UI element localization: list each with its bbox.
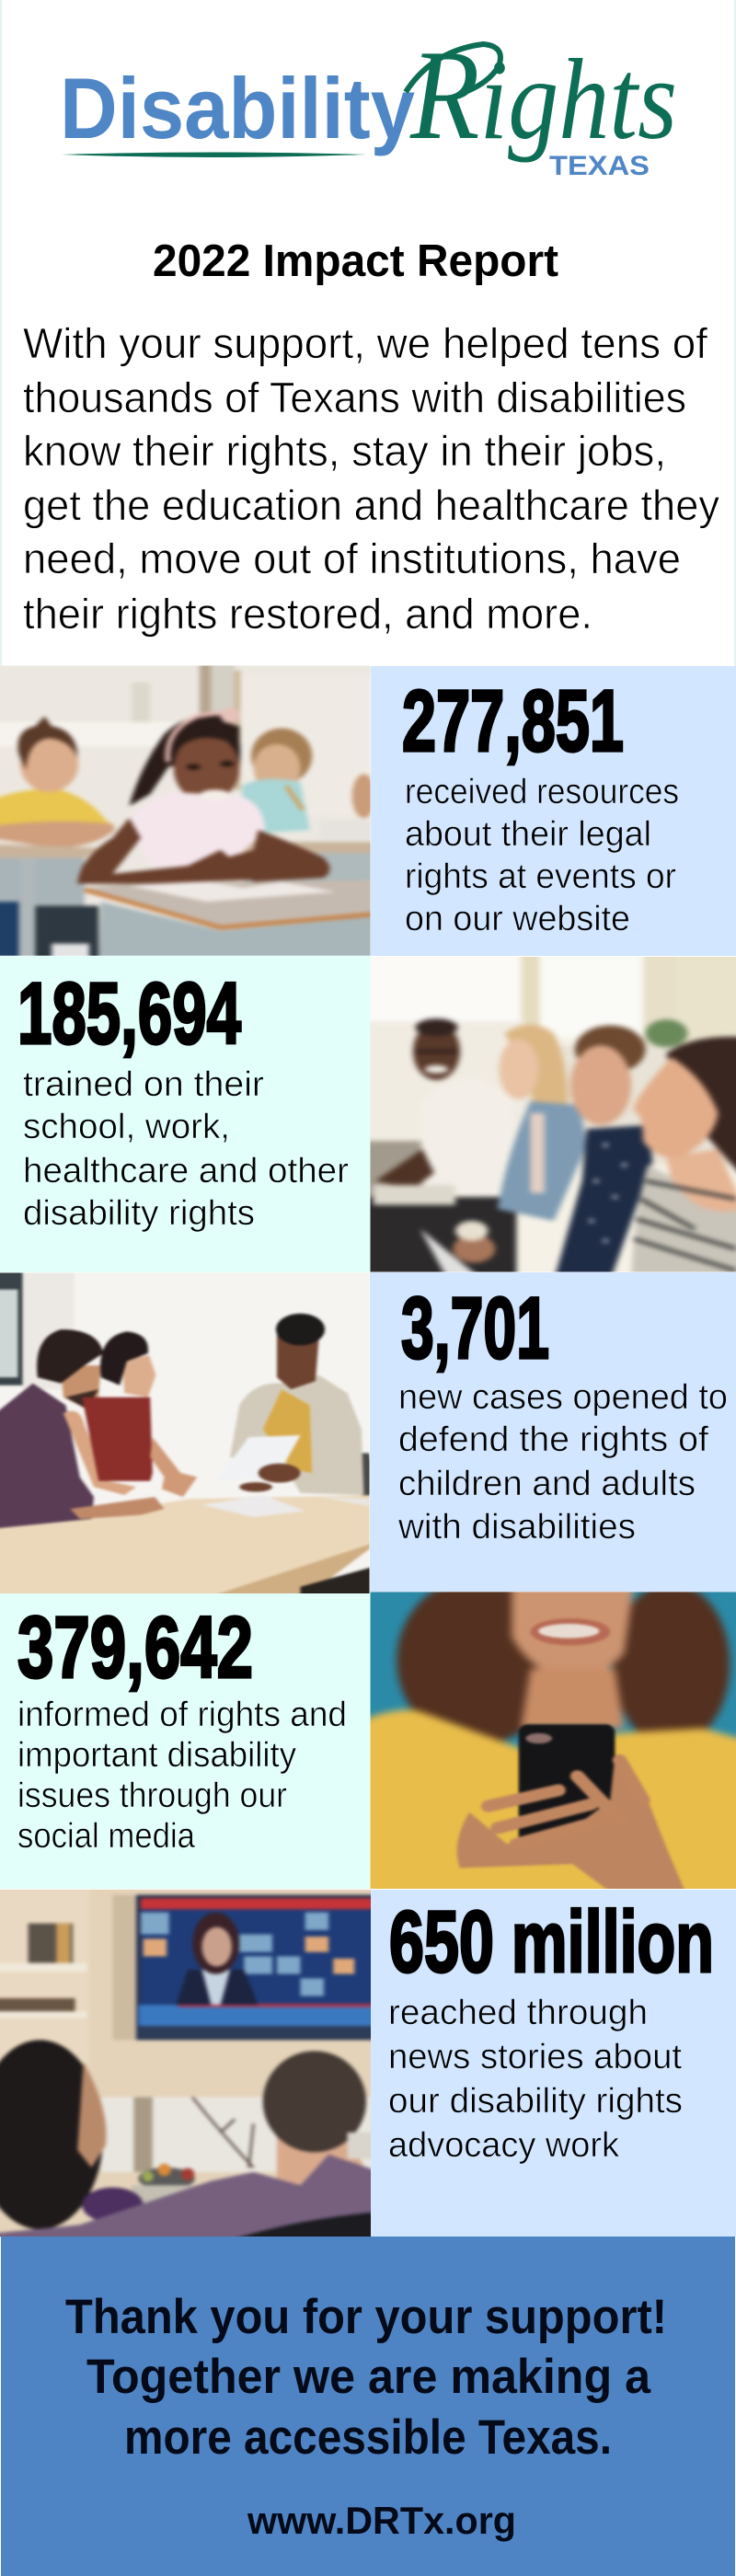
thank-you message: Thank you for your support!: [65, 2290, 667, 2344]
stat panel: 379,642: [0, 1593, 371, 1889]
stat panel: 185,694: [0, 956, 371, 1272]
website URL: www.DRTx.org: [247, 2499, 516, 2542]
intro text block: know their rights, stay in their jobs,: [23, 427, 666, 475]
photo: advisor meeting with couple at table: [0, 1266, 380, 1601]
description: healthcare and other: [23, 1152, 349, 1190]
number: 277,851: 277,851: [402, 673, 624, 770]
number: 379,642: 379,642: [17, 1599, 253, 1696]
stat panel: 650 million: [371, 1890, 736, 2237]
panel: cases row: [0, 1266, 736, 1601]
description: advocacy work: [388, 2126, 620, 2165]
intro text block: get the education and healthcare they: [23, 481, 719, 529]
intro text block: their rights restored, and more.: [23, 590, 592, 638]
stat panel: 277,851: [371, 666, 736, 956]
number: 3,701: 3,701: [401, 1280, 549, 1377]
photo: woman smiling and holding smartphone: [362, 1577, 736, 1896]
description: disability rights: [23, 1194, 255, 1233]
description: on our website: [405, 900, 630, 938]
description: our disability rights: [388, 2082, 683, 2121]
panel: news row: [0, 1881, 736, 2247]
logo word: Texas: TEXAS: [549, 151, 650, 181]
description: reached through: [388, 1994, 648, 2032]
intro text block: need, move out of institutions, have: [23, 535, 681, 582]
description: informed of rights and: [17, 1696, 347, 1734]
description: news stories about: [388, 2038, 682, 2076]
title: 2022 Impact Report: [153, 236, 558, 286]
description: important disability: [17, 1736, 296, 1775]
thank-you message: more accessible Texas.: [124, 2410, 612, 2465]
thank-you message: [65, 2290, 667, 2465]
photo: smiling girl in classroom: [0, 659, 381, 963]
intro text block: [23, 319, 719, 638]
description: school, work,: [23, 1108, 230, 1146]
number: 185,694: 185,694: [17, 965, 241, 1063]
logo word: Rights: Rights: [409, 24, 677, 167]
panel: thank-you footer: [1, 2237, 735, 2576]
logo word: Disability: Disability: [60, 60, 415, 156]
description: issues through our: [17, 1777, 287, 1815]
description: defend the rights of: [398, 1420, 708, 1459]
panel: trained row: [0, 949, 736, 1281]
description: [388, 1994, 683, 2165]
stat panel: 3,701: [370, 1272, 736, 1592]
logo: Disability Rights Texas: [60, 24, 677, 181]
logo underline swoosh: [62, 153, 366, 157]
photo: couple watching TV news: [0, 1881, 380, 2247]
panel: resources row: [0, 659, 736, 963]
description: [405, 773, 679, 938]
description: received resources: [405, 773, 679, 811]
description: [23, 1065, 349, 1233]
description: trained on their: [23, 1065, 264, 1104]
description: rights at events or: [405, 857, 676, 896]
thank-you message: Together we are making a: [86, 2350, 650, 2404]
description: new cases opened to: [398, 1378, 728, 1417]
intro text block: thousands of Texans with disabilities: [23, 374, 686, 421]
panel: social media row: [0, 1577, 736, 1896]
description: with disabilities: [397, 1508, 636, 1547]
description: about their legal: [405, 815, 651, 854]
description: children and adults: [398, 1465, 696, 1503]
description: [397, 1378, 728, 1547]
description: social media: [17, 1817, 196, 1856]
intro text block: With your support, we helped tens of: [23, 319, 707, 367]
photo: group of people smiling in training: [362, 949, 736, 1281]
description: [17, 1696, 347, 1856]
